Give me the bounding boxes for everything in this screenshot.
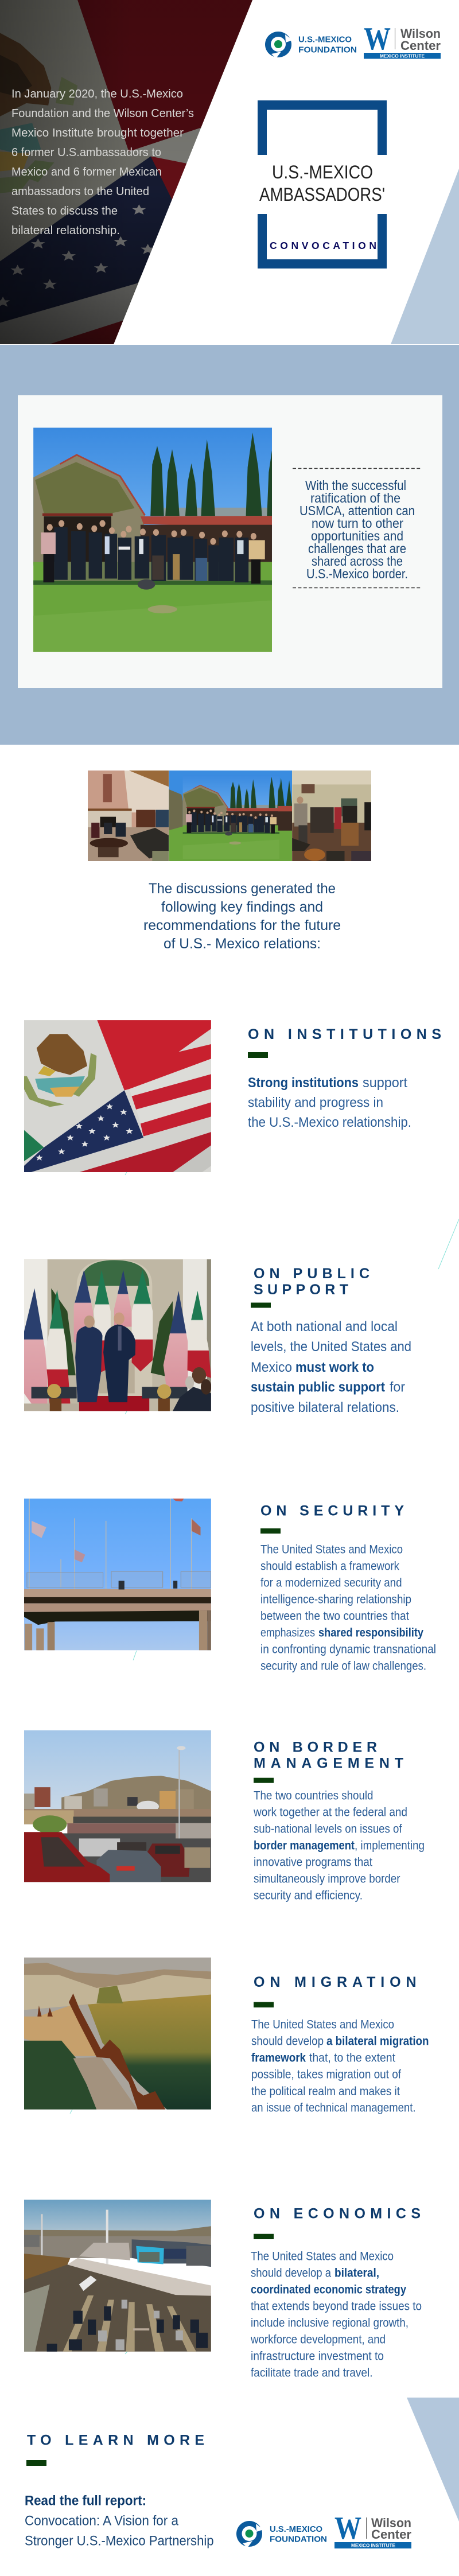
report link text: Stronger U.S.-Mexico Partnership	[25, 2534, 213, 2549]
hero intro text: Mexico Institute brought together	[11, 126, 184, 139]
photo: Mexican and U.S. flags	[24, 1020, 211, 1172]
body text: emphasizes	[260, 1626, 315, 1640]
logo: Wilson Center Mexico Institute (top): W	[364, 21, 391, 57]
body text	[248, 1075, 411, 1130]
logo: U.S.-Mexico Foundation (bottom)	[236, 2521, 327, 2548]
section: on institutions	[24, 1020, 441, 1172]
body text: between the two countries that	[260, 1609, 409, 1623]
hero photo panel: darkened Mexican and U.S. flags	[0, 0, 252, 344]
report link text	[25, 2493, 213, 2549]
blue band	[0, 345, 459, 745]
report link text: Read the full report:	[25, 2493, 146, 2509]
body text	[260, 1543, 436, 1673]
logo: U.S.-Mexico Foundation (bottom): U.S.-MEXICO	[270, 2524, 322, 2534]
body text: should develop	[251, 2034, 324, 2048]
logo: Wilson Center Mexico Institute (bottom): MEXICO INSTITUTE	[351, 2543, 395, 2548]
body text: stability and progress in	[248, 1095, 383, 1111]
section: on economics	[24, 2200, 422, 2379]
body text: shared responsibility	[318, 1626, 423, 1640]
body text: that, to the extent	[309, 2051, 395, 2065]
section: to learn more	[25, 2433, 213, 2549]
photo: border wall over hills	[24, 1958, 211, 2110]
logo: Wilson Center Mexico Institute (top): Wilson	[400, 26, 441, 41]
body text: The two countries should	[254, 1789, 373, 1803]
photo: port of entry aerial	[24, 2200, 211, 2352]
callout: USMCA text with dashed rules: challenges that are	[308, 541, 406, 556]
heading: TO LEARN MORE	[27, 2433, 204, 2449]
heading: SUPPORT	[254, 1282, 348, 1298]
hero intro text: States to discuss the	[11, 204, 118, 217]
logo: U.S.-Mexico Foundation (bottom): FOUNDATION	[270, 2535, 327, 2544]
accent bar	[251, 1302, 271, 1308]
body text: border management	[254, 1839, 355, 1853]
callout: USMCA text with dashed rules: now turn to other	[312, 516, 403, 531]
hero intro text: ambassadors to the United	[11, 185, 149, 198]
body text: an issue of technical management.	[251, 2101, 415, 2115]
body text: Mexico	[251, 1360, 292, 1375]
heading	[254, 1266, 369, 1298]
body text: security and rule of law challenges.	[260, 1659, 426, 1673]
accent bar	[254, 2234, 274, 2239]
section: on migration	[24, 1958, 429, 2115]
body text: for	[390, 1379, 405, 1395]
body text: the U.S.-Mexico relationship.	[248, 1115, 411, 1130]
body text: levels, the United States and	[251, 1339, 411, 1355]
body text: , implementing	[355, 1839, 425, 1853]
body text: facilitate trade and travel.	[251, 2365, 373, 2379]
hero intro text: 6 former U.S.ambassadors to	[11, 146, 161, 159]
body text: include inclusive regional growth,	[251, 2316, 409, 2330]
body text: support	[363, 1075, 407, 1091]
logo: Wilson Center Mexico Institute (bottom): Center	[371, 2527, 411, 2542]
panel: USMCA card	[18, 395, 442, 688]
heading: ON INSTITUTIONS	[248, 1026, 441, 1042]
logo: Wilson Center Mexico Institute (top)	[364, 21, 441, 59]
logo: Wilson Center Mexico Institute (top): MEXICO INSTITUTE	[380, 53, 425, 59]
photo: group portrait	[33, 428, 274, 652]
hero intro text: Foundation and the Wilson Center’s	[11, 107, 194, 120]
intro text: key findings: of U.S.- Mexico relations:	[164, 936, 321, 952]
heading	[254, 1740, 403, 1772]
body text	[250, 2250, 422, 2379]
body text: The United States and Mexico	[260, 1543, 403, 1557]
callout: USMCA text with dashed rules	[293, 468, 422, 587]
body text: bilateral,	[334, 2266, 379, 2280]
callout: USMCA text with dashed rules: opportunities and	[311, 528, 403, 543]
body text: The United States and Mexico	[251, 2017, 394, 2031]
body text: simultaneously improve border	[254, 1872, 400, 1886]
hero intro text: bilateral relationship.	[11, 224, 120, 237]
heading: ON ECONOMICS	[254, 2205, 421, 2221]
title block: bracket frame with convocation title: CONVOCATION	[270, 240, 376, 251]
body text: intelligence-sharing relationship	[260, 1593, 411, 1606]
body text: for a modernized security and	[260, 1576, 402, 1590]
body text: innovative programs that	[254, 1855, 372, 1869]
body text: a bilateral migration	[326, 2034, 429, 2048]
body text: Strong institutions	[248, 1075, 359, 1091]
photo: group portrait, wide crop	[169, 771, 292, 861]
section: on security	[24, 1499, 436, 1673]
hero intro text: In January 2020, the U.S.-Mexico	[11, 87, 183, 100]
intro text: key findings	[143, 881, 341, 952]
body text: coordinated economic strategy	[251, 2283, 406, 2297]
hero intro text: Mexico and 6 former Mexican	[11, 165, 162, 178]
body text: sustain public support	[251, 1379, 385, 1395]
heading: ON BORDER	[254, 1740, 377, 1756]
body text: should develop a	[251, 2266, 331, 2280]
accent bar	[248, 1052, 268, 1058]
logo: Wilson Center Mexico Institute (bottom): Wilson	[371, 2516, 411, 2530]
body text: that extends beyond trade issues to	[251, 2299, 422, 2313]
body text: the political realm and makes it	[251, 2084, 400, 2098]
body text	[253, 1789, 425, 1902]
intro text: key findings: The discussions generated the	[149, 881, 336, 897]
title block: bracket frame with convocation title: U.S.-MEXICO	[272, 162, 373, 182]
photo: leaders with flags at podiums	[24, 1259, 211, 1411]
intro text: key findings: following key findings and	[161, 899, 323, 915]
body text: positive bilateral relations.	[251, 1400, 399, 1415]
body text: should establish a framework	[260, 1559, 399, 1573]
intro text: key findings: recommendations for the future	[143, 917, 341, 933]
accent bar	[254, 1778, 274, 1783]
section: on border management	[24, 1730, 425, 1902]
decorative corner triangle: top	[391, 169, 459, 344]
report link text: Convocation: A Vision for a	[25, 2513, 179, 2529]
heading: ON SECURITY	[260, 1503, 404, 1519]
heading: MANAGEMENT	[254, 1756, 403, 1772]
photo: border bridge	[24, 1499, 211, 1650]
logo: U.S.-Mexico Foundation (top): U.S.-MEXICO	[298, 34, 352, 45]
decorative corner triangle: bottom	[407, 2398, 459, 2521]
body text: framework	[251, 2051, 306, 2065]
photo: border crossing traffic	[24, 1730, 211, 1882]
body text: work together at the federal and	[253, 1805, 407, 1819]
title block: bracket frame with convocation title: AMBASSADORS'	[259, 184, 385, 205]
accent bar	[26, 2460, 46, 2466]
callout: USMCA text with dashed rules: USMCA, attention can	[299, 503, 415, 518]
body text: sub-national levels on issues of	[254, 1822, 402, 1836]
logo: Wilson Center Mexico Institute (top): Center	[400, 38, 441, 53]
body text: must work to	[295, 1360, 374, 1375]
accent bar	[254, 2002, 274, 2007]
body text: infrastructure investment to	[251, 2349, 384, 2363]
callout: USMCA text with dashed rules: With the successful	[305, 478, 406, 493]
photo collage: three convocation photos	[88, 771, 371, 861]
logo: U.S.-Mexico Foundation (top)	[265, 32, 357, 59]
heading: ON PUBLIC	[254, 1266, 369, 1282]
title block: bracket frame with convocation title	[258, 100, 387, 269]
callout: USMCA text with dashed rules: U.S.-Mexico border.	[306, 566, 408, 581]
body text: workforce development, and	[250, 2333, 386, 2347]
callout: USMCA text with dashed rules: ratification of the	[310, 491, 400, 505]
heading: ON MIGRATION	[254, 1974, 417, 1990]
hero intro text	[11, 87, 194, 237]
body text: security and efficiency.	[254, 1889, 363, 1902]
section: on public support	[24, 1259, 411, 1415]
body text: At both national and local	[251, 1319, 398, 1334]
body text: The United States and Mexico	[251, 2250, 394, 2263]
logo: Wilson Center Mexico Institute (bottom): W	[334, 2511, 361, 2546]
accent bar	[260, 1528, 281, 1534]
photo: living room discussion	[88, 771, 169, 861]
body text	[251, 1319, 411, 1415]
callout: USMCA text with dashed rules: shared across the	[312, 554, 403, 569]
body text: in confronting dynamic transnational	[260, 1643, 436, 1656]
body text: possible, takes migration out of	[251, 2068, 401, 2081]
logo: U.S.-Mexico Foundation (top): FOUNDATION	[298, 45, 357, 55]
body text	[251, 2017, 429, 2115]
photo: evening reception	[292, 771, 371, 861]
logo: Wilson Center Mexico Institute (bottom)	[334, 2511, 411, 2548]
